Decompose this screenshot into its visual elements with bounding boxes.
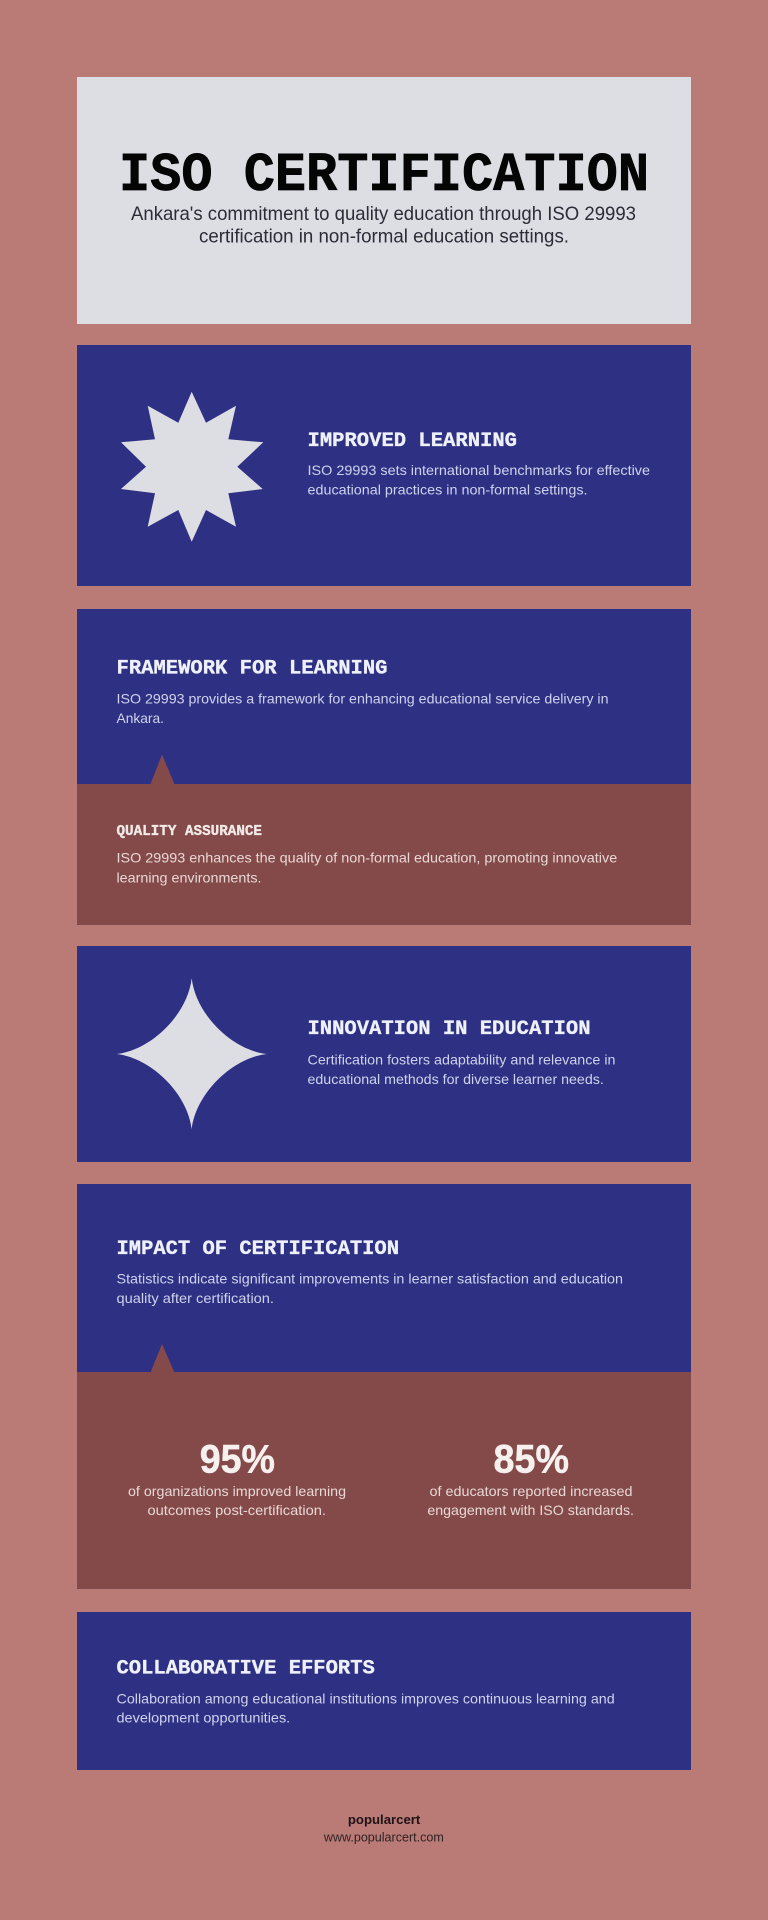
- heading: impact of certification: IMPACT OF CERTIFICATION: [116, 1238, 399, 1261]
- panel: improved learning: [77, 345, 691, 586]
- text: quality assurance description: [116, 850, 617, 885]
- heading: improved learning: IMPROVED LEARNING: [308, 430, 517, 453]
- text: collaborative description: Collaboration among educational institutions improves continuous learning and: [116, 1690, 615, 1706]
- subtitle: Ankara's commitment to quality education through ISO 29993: [131, 203, 636, 225]
- stat: 85%: engagement with ISO standards.: [427, 1502, 634, 1518]
- panel: statistics: [77, 1372, 691, 1589]
- text: quality assurance description: learning environments.: [116, 869, 262, 885]
- footer: www.popularcert.com: [323, 1829, 444, 1844]
- icon: four-point star: [117, 978, 267, 1129]
- arrow: callout pointer: [150, 755, 174, 784]
- footer: [323, 1812, 444, 1844]
- stat: 95%: of organizations improved learning: [128, 1483, 346, 1499]
- text: improved learning description: ISO 29993 sets international benchmarks for effective: [308, 462, 650, 478]
- text: collaborative description: [116, 1690, 615, 1726]
- panel: quality assurance: [77, 784, 691, 925]
- text: framework description: ISO 29993 provides a framework for enhancing educational service delivery in: [116, 691, 608, 707]
- text: improved learning description: educational practices in non-formal settings.: [308, 482, 588, 498]
- subtitle: certification in non-formal education settings.: [199, 226, 569, 248]
- text: impact description: [116, 1270, 623, 1306]
- panel: title: [77, 77, 691, 324]
- text: impact description: Statistics indicate significant improvements in learner satisfaction and education: [116, 1270, 623, 1286]
- heading: innovation in education: INNOVATION IN EDUCATION: [308, 1018, 590, 1041]
- text: quality assurance description: ISO 29993 enhances the quality of non-formal education, promoting innovative: [116, 850, 617, 866]
- stat: 85%: [427, 1438, 634, 1518]
- text: innovation description: educational methods for diverse learner needs.: [308, 1071, 604, 1087]
- heading: framework for learning: FRAMEWORK FOR LEARNING: [116, 658, 388, 680]
- text: innovation description: [308, 1052, 616, 1087]
- heading: collaborative efforts: COLLABORATIVE EFFORTS: [116, 1658, 375, 1680]
- text: framework description: [116, 691, 608, 726]
- heading: quality assurance: QUALITY ASSURANCE: [116, 823, 262, 840]
- stat: 85%: of educators reported increased: [430, 1483, 632, 1499]
- stat: 85%: 85%: [494, 1438, 569, 1482]
- title: ISO CERTIFICATION: [119, 144, 649, 207]
- icon: ten-point star: [121, 392, 263, 542]
- footer: popularcert: [348, 1812, 421, 1827]
- text: impact description: quality after certification.: [116, 1290, 274, 1306]
- panel: collaborative efforts: [77, 1612, 691, 1770]
- text: framework description: Ankara.: [116, 710, 164, 726]
- stat: 95%: outcomes post-certification.: [148, 1502, 326, 1518]
- panel: framework for learning: [77, 609, 691, 784]
- subtitle: [131, 203, 636, 248]
- arrow: callout pointer: [150, 1344, 174, 1372]
- panel: innovation in education: [77, 946, 691, 1162]
- text: improved learning description: [308, 462, 650, 498]
- text: innovation description: Certification fosters adaptability and relevance in: [308, 1052, 616, 1068]
- stat: 95%: 95%: [200, 1438, 275, 1482]
- stat: 95%: [128, 1438, 346, 1518]
- panel: impact of certification: [77, 1184, 691, 1372]
- text: collaborative description: development opportunities.: [116, 1710, 290, 1726]
